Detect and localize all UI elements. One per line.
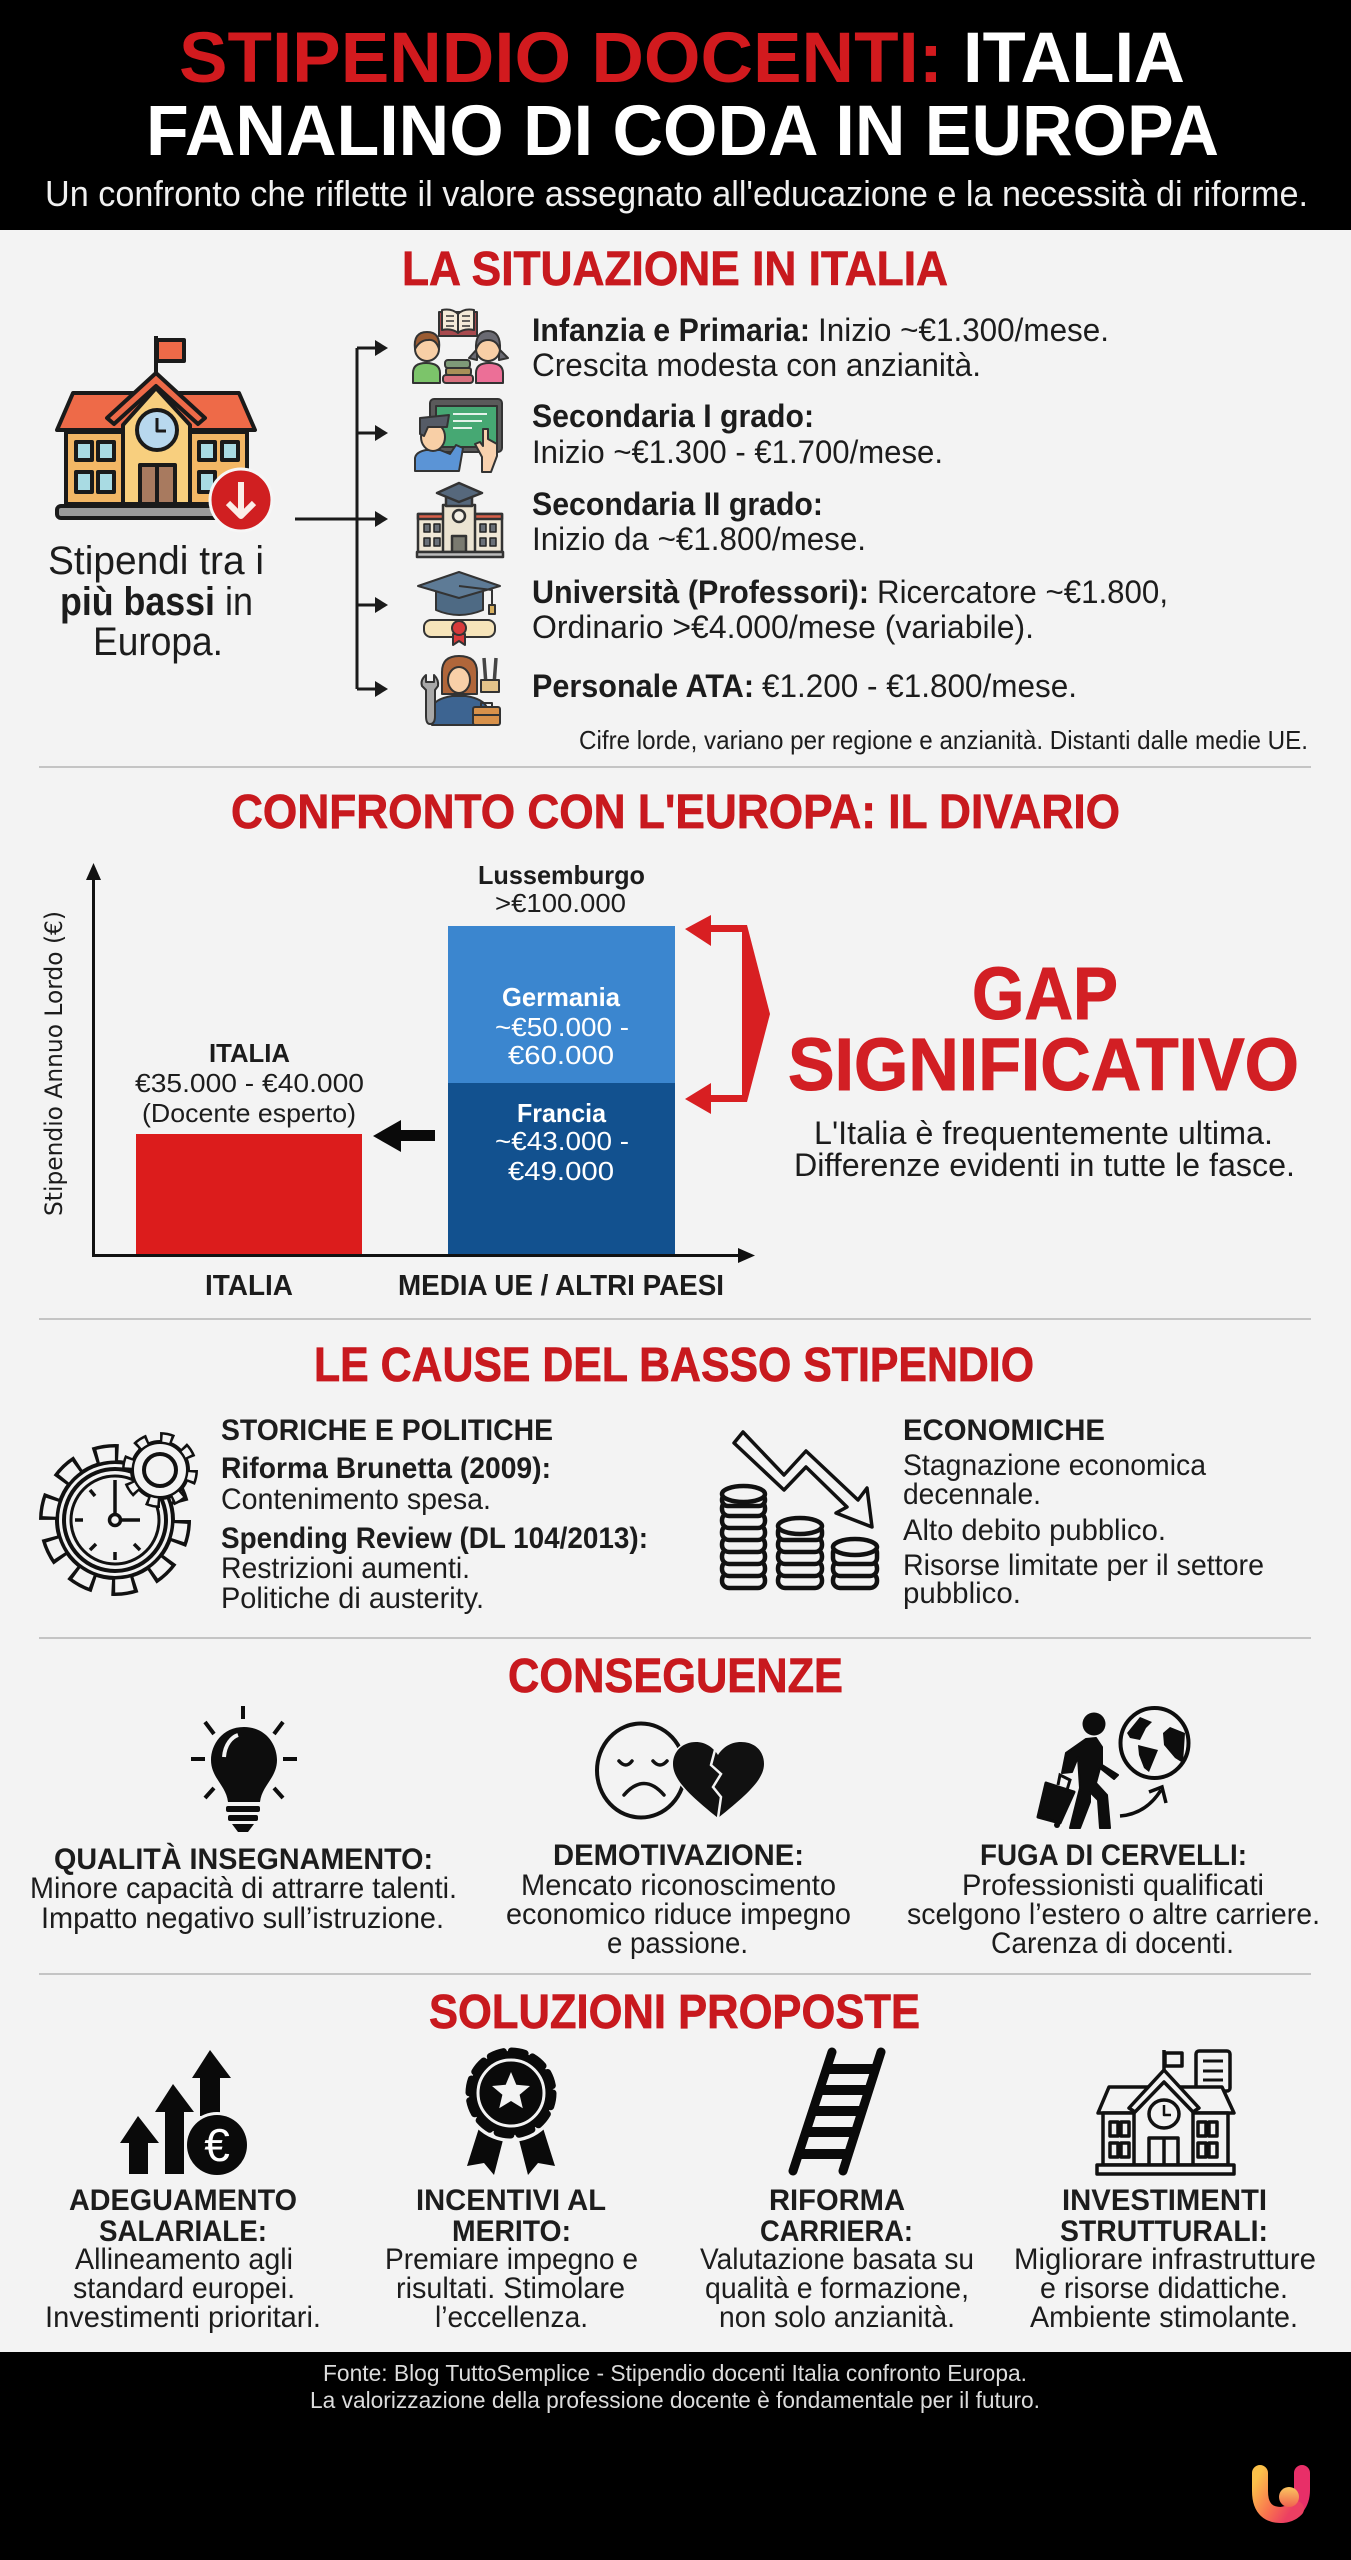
callout: gap significativo (788, 952, 1299, 1183)
solution: incentivi al merito: risultati. Stimolare (396, 2272, 625, 2305)
subtitle: Un confronto che riflette il valore assegnato all'educazione e la necessità di riforme. (45, 173, 1308, 214)
text: storiche e politiche: Contenimento spesa. (221, 1483, 491, 1516)
solution: investimenti strutturali (1014, 2184, 1316, 2334)
icon: school with book (1097, 2050, 1234, 2174)
callout: gap significativo: GAP (972, 952, 1118, 1035)
title: STIPENDIO DOCENTI: (179, 19, 943, 98)
arrow: black pointing to Italia (373, 1120, 435, 1152)
item: secondaria II grado (532, 486, 866, 557)
label: Italia value (135, 1038, 364, 1128)
text: stipendi tra i più bassi in Europa (48, 539, 264, 664)
label: Italia value: €35.000 - €40.000 (135, 1068, 364, 1098)
item: università: Università (Professori): (532, 574, 869, 610)
item: personale ATA: Personale ATA: (532, 668, 754, 704)
text: economiche: Stagnazione economica (903, 1449, 1206, 1482)
consequence: demotivazione: e passione. (607, 1927, 748, 1960)
text: storiche e politiche: Politiche di austerity. (221, 1582, 484, 1615)
callout: gap significativo: L'Italia è frequentemente ultima. (814, 1115, 1273, 1151)
solution: investimenti strutturali: STRUTTURALI: (1060, 2215, 1268, 2248)
item: secondaria I grado: Secondaria I grado: (532, 398, 814, 434)
text: economiche: ECONOMICHE (903, 1414, 1105, 1447)
solution: riforma carriera: CARRIERA: (760, 2215, 913, 2248)
solution: investimenti strutturali: INVESTIMENTI (1062, 2184, 1267, 2217)
solution: incentivi al merito (385, 2184, 638, 2334)
heading: soluzioni proposte: SOLUZIONI PROPOSTE (429, 1986, 920, 2039)
icon: rising arrows and euro coin: € (204, 2119, 230, 2171)
solution: investimenti strutturali: Migliorare infrastrutture (1014, 2243, 1316, 2276)
consequence: demotivazione (506, 1839, 851, 1960)
solution: incentivi al merito: Premiare impegno e (385, 2243, 638, 2276)
text: economiche: Risorse limitate per il settore (903, 1549, 1264, 1582)
text: stipendi tra i più bassi in Europa: più bassi (60, 580, 215, 624)
icon: teacher with board (415, 399, 502, 472)
solution: adeguamento salariale: standard europei. (73, 2272, 295, 2305)
item: personale ATA: €1.200 - €1.800/mese. (762, 668, 1077, 704)
text: storiche e politiche: STORICHE E POLITICHE (221, 1414, 553, 1447)
label: Lussemburgo (478, 860, 645, 918)
item: secondaria II grado: Inizio da ~€1.800/mese. (532, 521, 866, 557)
icon: light bulb (191, 1706, 297, 1832)
solution: riforma carriera: RIFORMA (769, 2184, 905, 2217)
panel: soluzioni proposte (45, 1986, 1316, 2334)
heading: conseguenze: CONSEGUENZE (508, 1650, 843, 1703)
consequence: qualità insegnamento: Impatto negativo sull’istruzione. (41, 1902, 444, 1935)
heading: le cause: LE CAUSE DEL BASSO STIPENDIO (314, 1339, 1034, 1392)
icon: gears and clock (49, 1438, 192, 1586)
label: Francia: Francia (517, 1098, 607, 1128)
solution: riforma carriera: Valutazione basata su (700, 2243, 974, 2276)
callout: gap significativo: SIGNIFICATIVO (788, 1023, 1299, 1106)
text: economiche: pubblico. (903, 1577, 1021, 1610)
source text: Fonte: Blog TuttoSemplice - Stipendio docenti Italia confronto Europa. (323, 2360, 1027, 2386)
footer (0, 2352, 1351, 2560)
text: stipendi tra i più bassi in Europa: in (225, 580, 253, 624)
text: storiche e politiche: Spending Review (DL 104/2013): (221, 1522, 648, 1555)
solution: adeguamento salariale: Investimenti prioritari. (45, 2301, 321, 2334)
solution: investimenti strutturali: e risorse didattiche. (1040, 2272, 1288, 2305)
heading: confronto con l'Europa: CONFRONTO CON L'EUROPA: IL DIVARIO (231, 786, 1120, 839)
item: infanzia e primaria: Inizio ~€1.300/mese. (818, 312, 1109, 348)
bar: Germania (448, 926, 675, 1083)
icon: school with down arrow (57, 336, 272, 531)
solution: incentivi al merito: MERITO: (452, 2215, 571, 2248)
consequence: fuga di cervelli: scelgono l’estero o altre carriere. (907, 1898, 1320, 1931)
text: stipendi tra i più bassi in Europa: Europa. (93, 620, 223, 664)
item: infanzia e primaria: Crescita modesta con anzianità. (532, 347, 981, 383)
label: Francia: €49.000 (508, 1156, 614, 1186)
label: Germania (495, 982, 629, 1070)
icon: children with book (413, 310, 508, 383)
panel: confronto con l'Europa (40, 786, 1299, 1302)
title: FANALINO DI CODA IN EUROPA (146, 92, 1219, 171)
solution: adeguamento salariale: ADEGUAMENTO (69, 2184, 297, 2217)
icon: ATA staff with tools (422, 656, 500, 725)
consequence: demotivazione: Mencato riconoscimento (521, 1869, 836, 1902)
item: infanzia e primaria (532, 312, 1109, 383)
title (146, 19, 1219, 171)
consequence: fuga di cervelli (907, 1839, 1320, 1960)
consequence: fuga di cervelli: Professionisti qualificati (962, 1869, 1264, 1902)
solution: adeguamento salariale (45, 2184, 321, 2334)
item: infanzia e primaria: Infanzia e Primaria: (532, 312, 810, 348)
axes (86, 863, 755, 1263)
text: stipendi tra i più bassi in Europa: Stipendi tra i (48, 539, 264, 583)
label: Italia value: ITALIA (209, 1038, 290, 1068)
footnote: cifre lorde: Cifre lorde, variano per regione e anzianità. Distanti dalle medie UE. (579, 725, 1308, 755)
solution: riforma carriera (700, 2184, 974, 2334)
panel: le cause (49, 1339, 1264, 1615)
item: secondaria I grado (532, 398, 943, 470)
icon: graduation cap and diploma (418, 572, 500, 645)
label: Lussemburgo: >€100.000 (495, 888, 626, 918)
consequence: qualità insegnamento: Minore capacità di attrarre talenti. (30, 1872, 457, 1905)
label: Germania: ~€50.000 - (495, 1012, 629, 1042)
item: secondaria II grado: Secondaria II grado: (532, 486, 823, 522)
label: Francia (495, 1098, 629, 1186)
text: storiche e politiche: Riforma Brunetta (2009): (221, 1452, 551, 1485)
bar: Italia (136, 1134, 362, 1254)
x axis labels: MEDIA UE / ALTRI PAESI (398, 1270, 724, 1302)
consequence: demotivazione: economico riduce impegno (506, 1898, 851, 1931)
text: economiche: decennale. (903, 1478, 1041, 1511)
icon: rising arrows and euro coin (120, 2050, 250, 2178)
solution: riforma carriera: non solo anzianità. (719, 2301, 955, 2334)
header banner (0, 0, 1351, 230)
solution: incentivi al merito: INCENTIVI AL (416, 2184, 606, 2217)
item: università (532, 574, 1168, 645)
solution: adeguamento salariale: Allineamento agli (75, 2243, 293, 2276)
text: storiche e politiche (221, 1414, 648, 1615)
icon: logo (1260, 2473, 1302, 2515)
icon: ladder (793, 2052, 881, 2171)
arrows: branching tree (295, 340, 388, 697)
item: personale ATA (532, 668, 1077, 704)
item: università: Ordinario >€4.000/mese (variabile). (532, 609, 1034, 645)
label: Francia: ~€43.000 - (495, 1126, 629, 1156)
text: economiche (903, 1414, 1264, 1610)
bar chart: stipendi annui (40, 860, 755, 1302)
consequence: fuga di cervelli: Carenza di docenti. (991, 1927, 1234, 1960)
icon: coins and falling arrow (722, 1432, 877, 1588)
panel: conseguenze (30, 1650, 1320, 1960)
solution: incentivi al merito: l’eccellenza. (435, 2301, 588, 2334)
label: Italia value: (Docente esperto) (142, 1098, 356, 1128)
source text (310, 2360, 1040, 2413)
icon: high school building (417, 483, 503, 557)
heading: la situazione in Italia: LA SITUAZIONE IN ITALIA (402, 243, 948, 296)
solution: riforma carriera: qualità e formazione, (705, 2272, 969, 2305)
consequence: qualità insegnamento (30, 1842, 457, 1935)
x axis labels: ITALIA (205, 1270, 293, 1302)
label: Germania: Germania (502, 982, 621, 1012)
solution: investimenti strutturali: Ambiente stimolante. (1030, 2301, 1298, 2334)
callout: gap significativo: Differenze evidenti in tutte le fasce. (794, 1147, 1295, 1183)
arrow: red gap bracket (685, 915, 770, 1114)
consequence: fuga di cervelli: FUGA DI CERVELLI: (980, 1839, 1247, 1872)
item: università: Ricercatore ~€1.800, (877, 574, 1168, 610)
bar: Francia (448, 1083, 675, 1254)
solution: adeguamento salariale: SALARIALE: (99, 2215, 267, 2248)
title: ITALIA (963, 19, 1185, 98)
y axis label: Stipendio Annuo Lordo (€) (40, 911, 68, 1216)
source text: La valorizzazione della professione docente è fondamentale per il futuro. (310, 2387, 1040, 2413)
consequence: demotivazione: DEMOTIVAZIONE: (553, 1839, 804, 1872)
consequence: qualità insegnamento: QUALITÀ INSEGNAMENTO: (54, 1842, 433, 1876)
icon: sad face and broken heart (597, 1724, 764, 1818)
x axis labels (205, 1270, 724, 1302)
label: Lussemburgo: Lussemburgo (478, 860, 645, 890)
panel: la situazione in Italia (48, 243, 1308, 755)
icon: medal with star (464, 2046, 558, 2175)
text: economiche: Alto debito pubblico. (903, 1514, 1166, 1547)
item: secondaria I grado: Inizio ~€1.300 - €1.700/mese. (532, 434, 943, 470)
icon: person leaving with suitcase and globe (1038, 1708, 1188, 1828)
text: storiche e politiche: Restrizioni aumenti. (221, 1552, 470, 1585)
label: Germania: €60.000 (508, 1040, 614, 1070)
